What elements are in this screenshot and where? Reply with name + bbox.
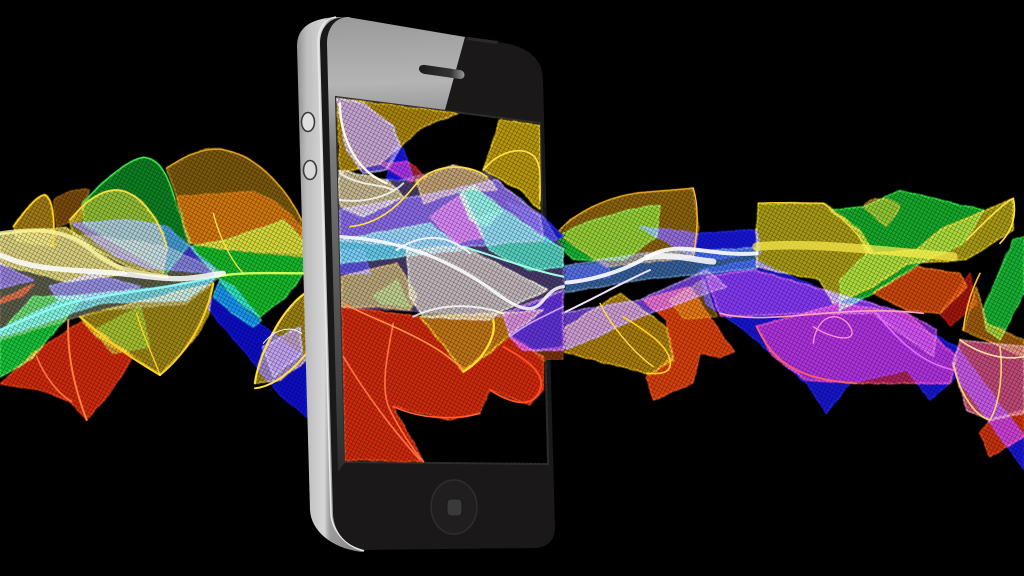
screen: blue small	[387, 147, 413, 180]
screen black area	[336, 97, 548, 464]
gold top lobe	[167, 149, 303, 253]
screen: base band	[338, 165, 563, 317]
center base band	[540, 248, 757, 297]
screen: green lower left	[373, 280, 410, 307]
pale yellow lobe	[0, 227, 127, 282]
purple left wedge	[0, 263, 33, 288]
green lobe	[83, 157, 190, 273]
phone	[297, 17, 555, 552]
red inner lobe	[177, 192, 303, 257]
screen: red mass	[342, 307, 543, 462]
blue left band	[563, 262, 612, 285]
ribbons: right section	[540, 170, 1024, 470]
left ribbon fills	[0, 149, 307, 420]
green right lobe	[190, 220, 304, 317]
yellow lobe main	[757, 198, 1013, 303]
phone white edge highlight	[318, 17, 364, 551]
orange red lobe	[873, 267, 967, 313]
small yellow lobe	[13, 195, 54, 247]
yellow-gold lower lobe	[562, 292, 675, 376]
right mesh	[540, 170, 1024, 470]
dark red lobe	[940, 273, 977, 327]
yellow lobe	[70, 190, 167, 273]
orange back lobe	[53, 190, 90, 227]
cyan band	[0, 277, 217, 337]
purple in leaf	[263, 327, 302, 377]
orange back lobe	[863, 199, 900, 227]
screen: brown tail	[533, 347, 563, 362]
green right lobe	[983, 237, 1024, 340]
pink right lobe	[953, 340, 1024, 420]
red left wedge	[0, 284, 33, 303]
phone screen ribbons	[330, 90, 570, 470]
right wires	[540, 188, 1024, 420]
screen: yellow mid arc	[417, 165, 497, 203]
violet band	[50, 273, 140, 300]
screen: purple middle	[340, 180, 543, 247]
speaker	[419, 65, 464, 79]
screen: purple lobe	[337, 98, 400, 173]
volume buttons	[302, 112, 316, 180]
screen: blue left	[340, 250, 370, 273]
screen mesh	[330, 90, 570, 470]
left mesh	[0, 148, 308, 420]
screen: purple right low	[503, 290, 563, 350]
screen: cyan left	[340, 223, 463, 263]
yellow leaf	[255, 293, 307, 383]
purple upper band	[707, 270, 937, 357]
gold lobe	[557, 188, 698, 267]
ribbons: left section	[0, 130, 312, 430]
screen: blue right	[507, 202, 563, 243]
blue top left wedge	[548, 221, 550, 222]
screen: yellow right	[483, 120, 540, 210]
home button	[431, 480, 477, 534]
screen: teal	[473, 210, 563, 270]
screen: yellow-orange	[420, 310, 543, 372]
screen ribbon fills	[337, 98, 563, 462]
left wires	[0, 149, 307, 420]
screen: left yellow	[338, 170, 403, 217]
base band	[0, 233, 223, 340]
red magenta mass	[757, 303, 957, 383]
screen: magenta	[430, 193, 483, 243]
blue band	[640, 227, 760, 261]
purple left band	[562, 268, 728, 350]
green inside yellow	[93, 307, 150, 353]
cyan teal pendant	[213, 280, 262, 327]
top notch	[467, 37, 498, 44]
green lobe main	[830, 190, 983, 310]
red bottom lobe	[980, 410, 1024, 457]
green lower left	[0, 297, 83, 377]
screen: red small	[380, 162, 427, 182]
phone body	[320, 17, 555, 550]
phone metal side band	[297, 17, 375, 552]
screen: gold top	[337, 98, 458, 173]
blue band	[73, 220, 220, 273]
right ribbon fills	[540, 188, 1024, 470]
screen wires	[340, 103, 563, 462]
dark orange band	[670, 280, 717, 318]
red orange lobe	[643, 287, 734, 400]
red lower lobe	[0, 320, 133, 420]
screen: pale center	[407, 247, 547, 320]
screen: green	[460, 185, 503, 227]
glass highlight	[327, 17, 465, 472]
green lobe	[553, 205, 660, 260]
blue lower mass	[700, 260, 1024, 470]
screen: orange lower left	[342, 263, 417, 310]
yellow lower lobe	[80, 283, 213, 375]
blue streak	[207, 287, 307, 417]
orange right strip	[963, 287, 1024, 357]
